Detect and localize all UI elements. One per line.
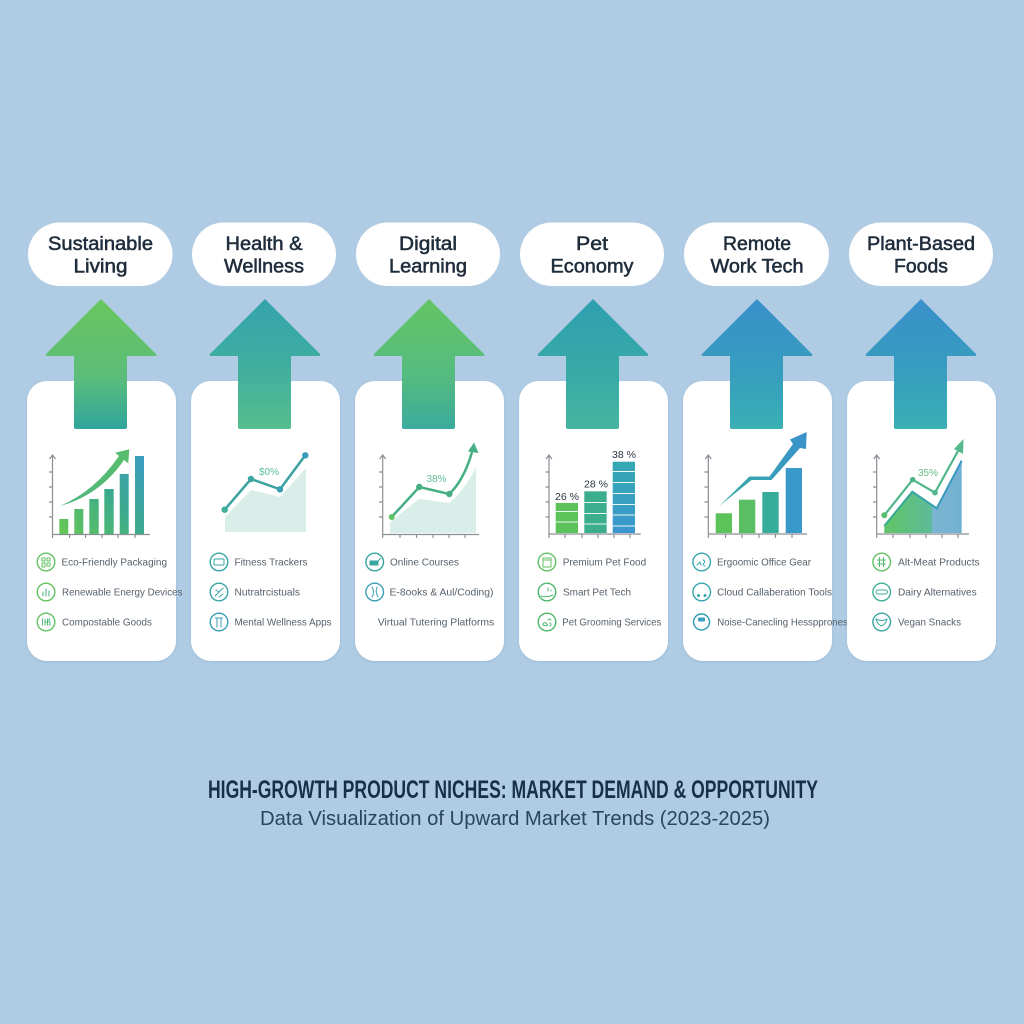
item text: Noise-Canecling Hesspprones [717, 616, 848, 628]
icon: mental wellness [210, 613, 228, 631]
list: Pet Economy [538, 553, 661, 631]
list: Sustainable Living [37, 553, 183, 631]
icon: online course [366, 553, 384, 571]
list: Plant-Based Foods [873, 553, 980, 631]
list: Health & Wellness [210, 553, 332, 631]
heading pill: Plant-Based Foods: Plant-Based [867, 233, 975, 255]
area chart: Plant-Based Foods: 35% [918, 468, 938, 479]
list: Digital Learning [366, 553, 494, 628]
icon: nutrition [210, 583, 228, 601]
arrow: Pet Economy [538, 299, 648, 429]
heading pill: Digital Learning [356, 222, 500, 286]
item text: Renewable Energy Devices [62, 586, 182, 598]
icon: packaging [37, 553, 55, 571]
item text: Cloud Callaberation Tools [717, 586, 832, 598]
bar chart: Sustainable Living [49, 449, 150, 538]
panel: Sustainable Living [27, 222, 182, 661]
icon: energy [37, 583, 55, 601]
heading pill: Remote Work Tech: Work Tech [710, 256, 804, 278]
arrow: Remote Work Tech [702, 299, 812, 429]
arrow: Plant-Based Foods [866, 299, 976, 429]
icon: compost [37, 613, 55, 631]
heading pill: Sustainable Living: Living [74, 256, 128, 278]
bar chart: Pet Economy: 26 % [555, 491, 579, 503]
heading pill: Sustainable Living [28, 222, 172, 286]
heading pill: Remote Work Tech: Remote [723, 233, 791, 255]
item text: Eco-Friendly Packaging [62, 556, 167, 568]
panel: Health & Wellness [191, 222, 340, 661]
item text: Online Courses [390, 556, 459, 568]
arrow: Health & Wellness [210, 299, 320, 429]
item text: Compostable Goods [62, 616, 152, 628]
icon: pet grooming [538, 613, 556, 631]
item text: Nutratrcistuals [234, 586, 300, 598]
icon: e-book [366, 583, 384, 601]
card: Digital Learning [355, 381, 504, 661]
card: Plant-Based Foods [847, 381, 996, 661]
subtitle: Data Visualization of Upward Market Trends (2023-2025) [260, 808, 770, 830]
card: Pet Economy [519, 381, 668, 661]
icon: headphones [694, 614, 710, 630]
panel: Plant-Based Foods [847, 222, 996, 661]
icon: pet tech [538, 583, 556, 601]
bar chart: Remote Work Tech [704, 432, 807, 538]
bar chart: Pet Economy: 28 % [584, 478, 608, 490]
icon: pet food [538, 553, 556, 571]
heading pill: Pet Economy: Economy [550, 256, 634, 278]
icon: ergonomic gear [693, 553, 710, 571]
item text: Mental Wellness Apps [234, 616, 332, 628]
heading pill: Plant-Based Foods [849, 222, 993, 286]
item text: Virtual Tutering Platforms [378, 616, 494, 628]
item text: Pet Grooming Services [562, 616, 661, 628]
panel: Digital Learning [355, 222, 504, 661]
item text: Ergoomic Office Gear [717, 556, 811, 568]
card: Health & Wellness [191, 381, 340, 661]
line chart: Health & Wellness: $0% [259, 467, 279, 478]
heading pill: Plant-Based Foods: Foods [894, 256, 948, 278]
item text: Dairy Alternatives [898, 586, 977, 598]
item text: Smart Pet Tech [563, 586, 631, 598]
card: Remote Work Tech [683, 381, 832, 661]
item text: Premium Pet Food [563, 556, 646, 568]
item text: E-8ooks & Aul/Coding) [390, 586, 494, 598]
heading pill: Digital Learning: Learning [389, 256, 467, 278]
heading pill: Health & Wellness: Wellness [224, 256, 304, 278]
heading pill: Health & Wellness [192, 222, 336, 286]
icon: dairy alternatives [873, 583, 890, 601]
card: Sustainable Living [27, 381, 176, 661]
item text: Vegan Snacks [898, 616, 961, 628]
arrow: Sustainable Living [46, 299, 156, 429]
heading pill: Remote Work Tech [684, 222, 829, 286]
panel: Remote Work Tech [683, 222, 848, 661]
list: Remote Work Tech [693, 553, 848, 630]
line chart: Digital Learning [379, 442, 479, 538]
heading pill: Pet Economy: Pet [576, 233, 609, 255]
area chart: Plant-Based Foods [873, 439, 969, 538]
line chart: Digital Learning: 38% [426, 474, 447, 485]
item text: Alt-Meat Products [898, 556, 980, 568]
icon: alt-meat [873, 553, 890, 571]
bar chart: Pet Economy [546, 449, 641, 538]
icon: vegan snacks [873, 613, 890, 631]
arrow: Digital Learning [374, 299, 484, 429]
item text: Fitness Trackers [234, 556, 308, 568]
icon: tracker [210, 553, 228, 571]
heading pill: Health & Wellness: Health & [226, 233, 302, 255]
heading pill: Sustainable Living: Sustainable [48, 233, 153, 255]
panel: Pet Economy [519, 222, 668, 661]
bar chart: Pet Economy: 38 % [612, 449, 636, 461]
heading pill: Digital Learning: Digital [399, 233, 457, 255]
heading pill: Pet Economy [520, 222, 664, 286]
line chart: Health & Wellness [222, 452, 308, 532]
icon: cloud collaboration [693, 583, 710, 601]
